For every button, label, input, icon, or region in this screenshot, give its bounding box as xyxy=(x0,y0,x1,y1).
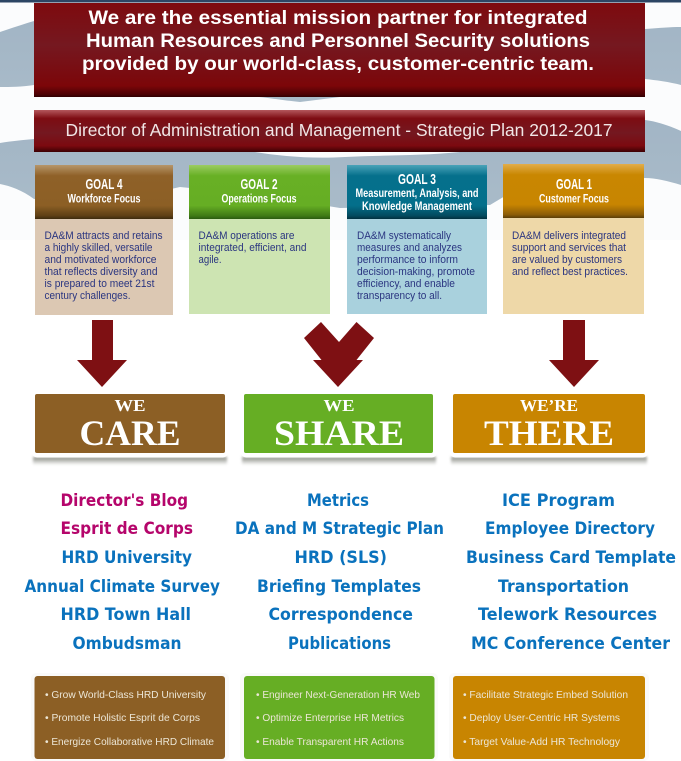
goal 4 panel: is prepared to meet 21st xyxy=(44,278,154,290)
panel: we share initiatives: • Enable Transparent HR Actions xyxy=(256,736,404,748)
goal 4 panel: Workforce Focus xyxy=(68,194,140,206)
goal 1 panel: are valued by customers xyxy=(512,254,622,266)
links: we care column: HRD Town Hall xyxy=(60,605,191,624)
goal 2 panel: integrated, efficient, and xyxy=(198,242,306,254)
links: we share column: Metrics xyxy=(307,491,369,510)
card: we're there: THERE xyxy=(484,413,614,453)
card: we share: SHARE xyxy=(274,413,404,453)
goal 3 panel: performance to inform xyxy=(357,254,458,266)
goal 4 panel: and motivated workforce xyxy=(44,254,156,266)
goal 1 panel: support and services that xyxy=(512,242,626,254)
card: we share: WE xyxy=(324,396,354,415)
goal 3 panel xyxy=(347,165,487,314)
panel: we share initiatives: • Engineer Next-Generation HR Web xyxy=(256,689,420,701)
links: we share column: DA and M Strategic Plan xyxy=(235,519,444,538)
goal 2 panel: GOAL 2 xyxy=(240,176,278,193)
goal 1 panel: GOAL 1 xyxy=(556,176,592,193)
links: we care column: HRD University xyxy=(62,548,192,567)
goal 1 panel: and reflect best practices. xyxy=(512,266,628,278)
goal 4 panel: DA&M attracts and retains xyxy=(44,230,163,242)
goal 3 panel: Knowledge Management xyxy=(362,201,472,213)
card: we're there: WE’RE xyxy=(520,396,578,415)
goal 3 panel: efficiency, and enable xyxy=(357,278,455,290)
panel: we're there initiatives xyxy=(449,673,649,761)
goal 4 panel: a highly skilled, versatile xyxy=(44,242,152,254)
goal 2 panel: agile. xyxy=(198,254,222,266)
card: we care xyxy=(32,391,228,465)
panel: we care initiatives: • Energize Collaborative HRD Climate xyxy=(45,736,214,748)
links: we're there column xyxy=(466,491,676,653)
links: we're there column: ICE Program xyxy=(502,491,615,510)
strategic plan banner xyxy=(34,110,645,152)
links: we're there column: MC Conference Center xyxy=(471,634,671,653)
links: we're there column: Employee Directory xyxy=(485,519,655,538)
goal 4 panel: that reflects diversity and xyxy=(44,266,158,278)
goal 3 panel: transparency to all. xyxy=(357,290,442,302)
panel: we're there initiatives: • Facilitate Strategic Embed Solution xyxy=(463,689,628,701)
links: we care column: Ombudsman xyxy=(72,634,182,653)
panel: we're there initiatives: • Deploy User-Centric HR Systems xyxy=(463,712,620,724)
links: we share column: Correspondence xyxy=(268,605,413,624)
goal 4 panel xyxy=(35,165,173,315)
goal 2 panel xyxy=(189,165,330,314)
panel: we share initiatives xyxy=(240,673,438,761)
goal 1 panel xyxy=(503,164,644,314)
links: we share column: HRD (SLS) xyxy=(294,548,387,567)
card: we're there xyxy=(450,391,648,465)
goal 2 panel: DA&M operations are xyxy=(198,230,294,242)
links: we share column xyxy=(235,491,444,653)
goal 1 panel: Customer Focus xyxy=(539,194,609,206)
panel: we care initiatives xyxy=(31,673,229,761)
panel: we care initiatives: • Grow World-Class HRD University xyxy=(45,689,207,701)
strategic plan banner: Director of Administration and Management - Strategic Plan 2012-2017 xyxy=(66,120,612,140)
goal 4 panel: century challenges. xyxy=(44,290,130,302)
links: we care column: Director's Blog xyxy=(60,491,188,510)
links: we're there column: Transportation xyxy=(498,577,629,596)
card: we share xyxy=(241,391,437,465)
goal 2 panel: Operations Focus xyxy=(222,194,296,206)
mission statement text: Human Resources and Personnel Security solutions xyxy=(86,30,590,52)
goal 3 panel: DA&M systematically xyxy=(357,230,451,242)
card: we care: WE xyxy=(114,396,146,415)
links: we're there column: Telework Resources xyxy=(478,605,657,624)
links: we care column: Esprit de Corps xyxy=(60,519,193,538)
mission statement text xyxy=(82,7,594,75)
background: flag waves xyxy=(0,0,681,240)
panel: we're there initiatives: • Target Value-Add HR Technology xyxy=(463,736,621,748)
panel: we share initiatives: • Optimize Enterprise HR Metrics xyxy=(256,712,404,724)
links: we care column: Annual Climate Survey xyxy=(24,577,220,596)
goal 3 panel: Measurement, Analysis, and xyxy=(356,188,478,200)
panel: we care initiatives: • Promote Holistic Esprit de Corps xyxy=(45,712,200,724)
arrow: goals 2 and 3 to we share xyxy=(304,322,374,387)
links: we share column: Briefing Templates xyxy=(257,577,421,596)
mission statement text: provided by our world-class, customer-centric team. xyxy=(82,53,594,75)
goal 3 panel: GOAL 3 xyxy=(398,171,436,188)
goal 1 panel: DA&M delivers integrated xyxy=(512,230,626,242)
goal 4 panel: GOAL 4 xyxy=(86,176,123,193)
card: we care: CARE xyxy=(80,413,180,453)
goal 3 panel: decision-making, promote xyxy=(357,266,475,278)
arrow: goal 4 to we care xyxy=(77,320,127,387)
arrow: goal 1 to we're there xyxy=(549,320,599,387)
links: we share column: Publications xyxy=(288,634,391,653)
links: we care column xyxy=(24,491,220,653)
mission banner xyxy=(34,3,645,97)
goal 3 panel: measures and analyzes xyxy=(357,242,462,254)
mission statement text: We are the essential mission partner for integrated xyxy=(88,7,588,29)
